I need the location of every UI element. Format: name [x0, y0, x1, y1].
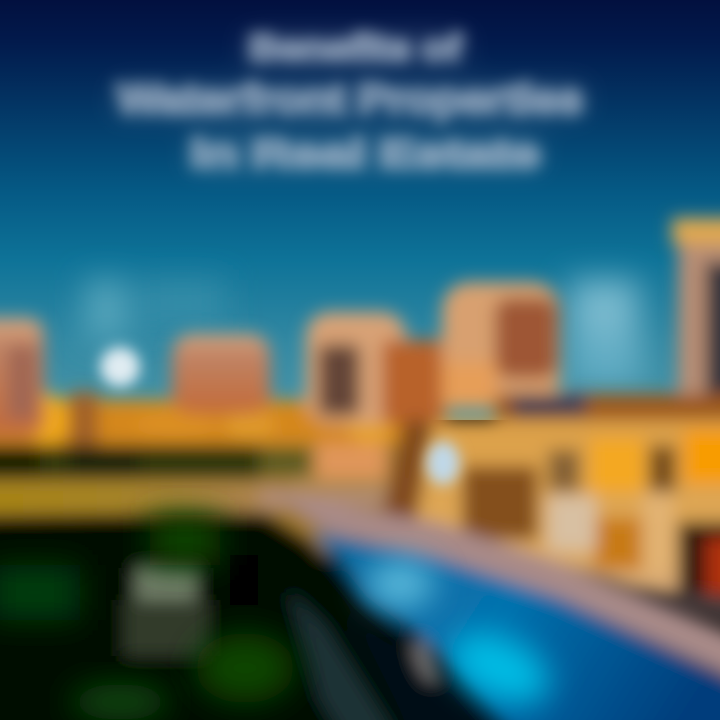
tower: third — [306, 312, 406, 424]
title: in Real Estate — [190, 132, 540, 176]
garden feature: lit top — [136, 568, 196, 600]
window glow — [426, 441, 460, 485]
tower: fourth shaded side — [495, 298, 557, 378]
pool highlight: upper — [366, 560, 434, 608]
tower: far left — [0, 318, 44, 436]
pool highlight: lower — [440, 619, 560, 717]
faint glass towers in the distance — [85, 280, 642, 385]
tower: second — [172, 334, 270, 414]
tower: third shaded side — [382, 340, 446, 424]
ground base — [0, 425, 720, 555]
warm plaza strip — [0, 444, 390, 512]
lawn green patch: lower — [195, 633, 295, 703]
tower: far left shading — [8, 345, 36, 419]
dark walkway — [288, 590, 395, 720]
tower: fourth base — [442, 362, 496, 408]
pool deck — [275, 495, 720, 690]
lawn green patch: top — [150, 515, 220, 565]
swimming pool — [312, 530, 720, 720]
garden feature: body — [124, 600, 208, 656]
right building: terrace roof — [495, 394, 720, 420]
lawn green patch: bottom — [70, 684, 170, 720]
orange midground band — [0, 392, 410, 448]
apartment towers — [0, 282, 560, 436]
near tower, right edge — [672, 218, 720, 410]
right building: diagonal column — [380, 420, 434, 522]
garden lawn — [0, 512, 500, 720]
title — [117, 27, 583, 176]
right building: lit facade — [400, 420, 720, 610]
title: Benefits of — [249, 27, 462, 68]
background: night sky — [0, 0, 720, 420]
moon — [100, 347, 140, 387]
lawn green patch: left — [0, 565, 80, 620]
title haze — [115, 35, 585, 168]
tower: fourth — [442, 282, 560, 406]
dark hedge band — [0, 445, 310, 479]
dark shoreline — [345, 610, 510, 720]
tower: third dark windows — [318, 344, 360, 416]
title: Waterfront Properties — [117, 75, 583, 122]
shoreline glint — [408, 634, 442, 686]
lawn dark column — [230, 555, 258, 605]
blurred scene — [0, 218, 720, 720]
right corner dark door — [620, 522, 720, 635]
